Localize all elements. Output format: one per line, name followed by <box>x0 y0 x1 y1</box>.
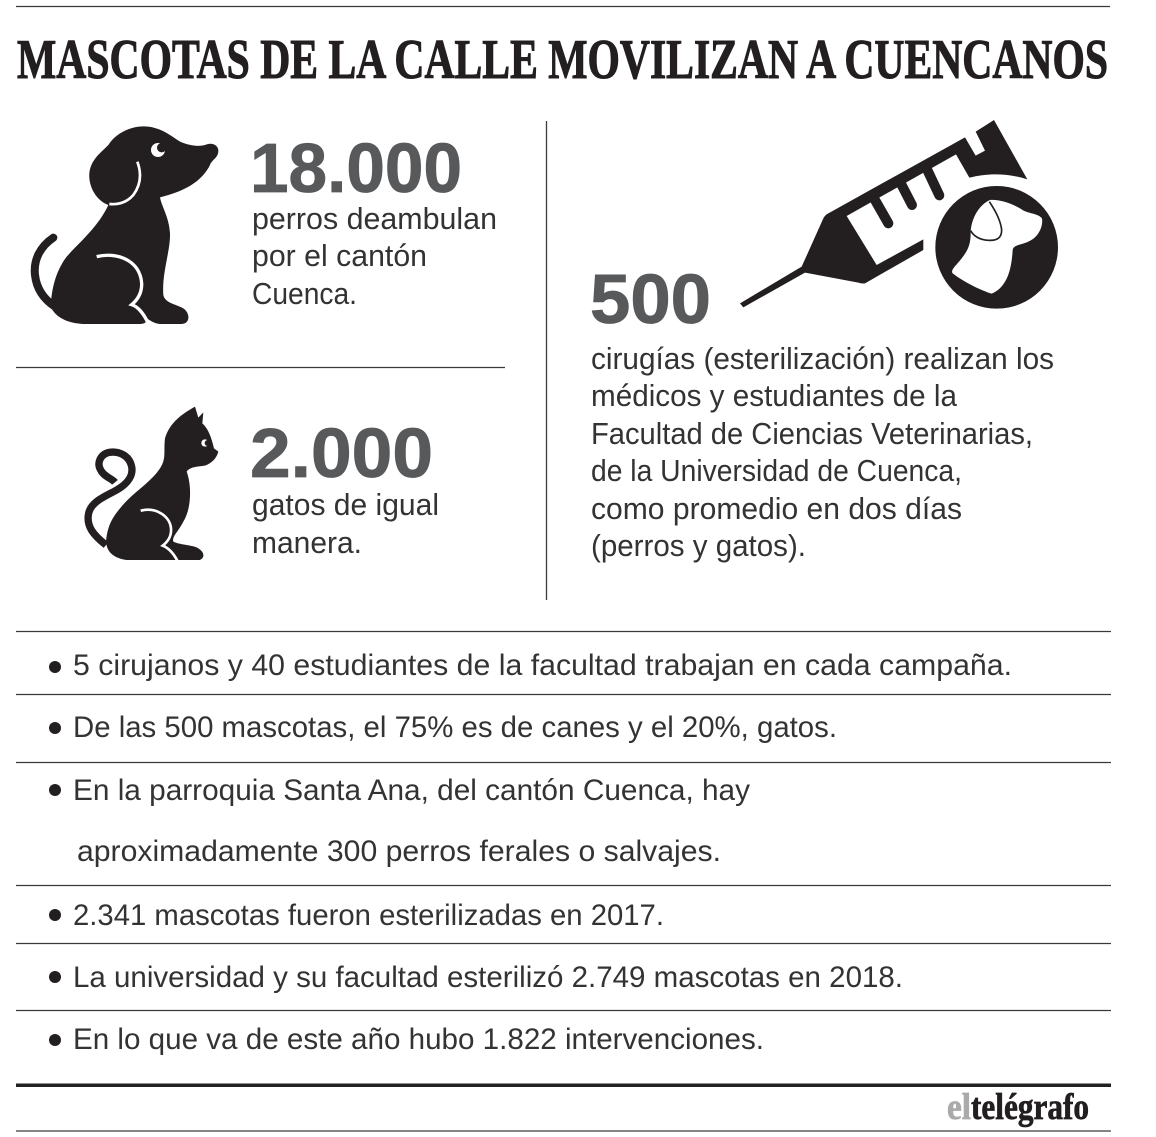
stat: 2.000 cats: 2.000 <box>250 414 433 492</box>
stat: 18.000 dogs: perros deambulan <box>252 201 497 236</box>
stat: 500 surgeries: de la Universidad de Cuenca, <box>591 453 962 488</box>
icon: syringe with dog <box>740 120 1058 309</box>
stat: 500 surgeries <box>590 260 1054 563</box>
bullet: 2018: La universidad y su facultad esterilizó 2.749 mascotas en 2018. <box>73 961 903 994</box>
bullet: surgeons and students: 5 cirujanos y 40 estudiantes de la facultad trabajan en cada campaña. <box>73 649 1012 682</box>
logo: el telégrafo: telégrafo <box>971 1087 1089 1128</box>
stat: 18.000 dogs: 18.000 <box>250 129 462 207</box>
bullet: this year: En lo que va de este año hubo 1.822 intervenciones. <box>73 1023 764 1056</box>
stat: 2.000 cats: manera. <box>252 525 362 560</box>
stat: 18.000 dogs: Cuenca. <box>252 276 357 311</box>
stat: 500 surgeries: como promedio en dos días <box>591 491 962 526</box>
stat: 500 surgeries: Facultad de Ciencias Veterinarias, <box>591 416 1033 451</box>
bullet: 2017: 2.341 mascotas fueron esterilizadas en 2017. <box>73 899 664 932</box>
stat: 500 surgeries: cirugías (esterilización) realizan los <box>591 341 1054 376</box>
bullet: Santa Ana: aproximadamente 300 perros ferales o salvajes. <box>77 835 721 868</box>
bullet list <box>49 649 1012 1056</box>
icon: dog <box>35 126 218 324</box>
stat: 500 surgeries: médicos y estudiantes de la <box>591 378 958 413</box>
stat: 500 surgeries: 500 <box>590 260 711 338</box>
stat: 2.000 cats <box>250 414 439 560</box>
logo: el telégrafo: el <box>947 1087 971 1128</box>
stat: 18.000 dogs <box>250 129 497 311</box>
stat: 18.000 dogs: por el cantón <box>252 238 427 273</box>
bullet: Santa Ana: En la parroquia Santa Ana, del cantón Cuenca, hay <box>73 774 750 807</box>
stat: 500 surgeries: (perros y gatos). <box>591 528 806 563</box>
stat: 2.000 cats: gatos de igual <box>252 487 439 522</box>
icon: cat <box>88 407 218 561</box>
bullet: share of pets: De las 500 mascotas, el 75% es de canes y el 20%, gatos. <box>73 711 837 744</box>
bullet: Santa Ana <box>49 774 750 868</box>
